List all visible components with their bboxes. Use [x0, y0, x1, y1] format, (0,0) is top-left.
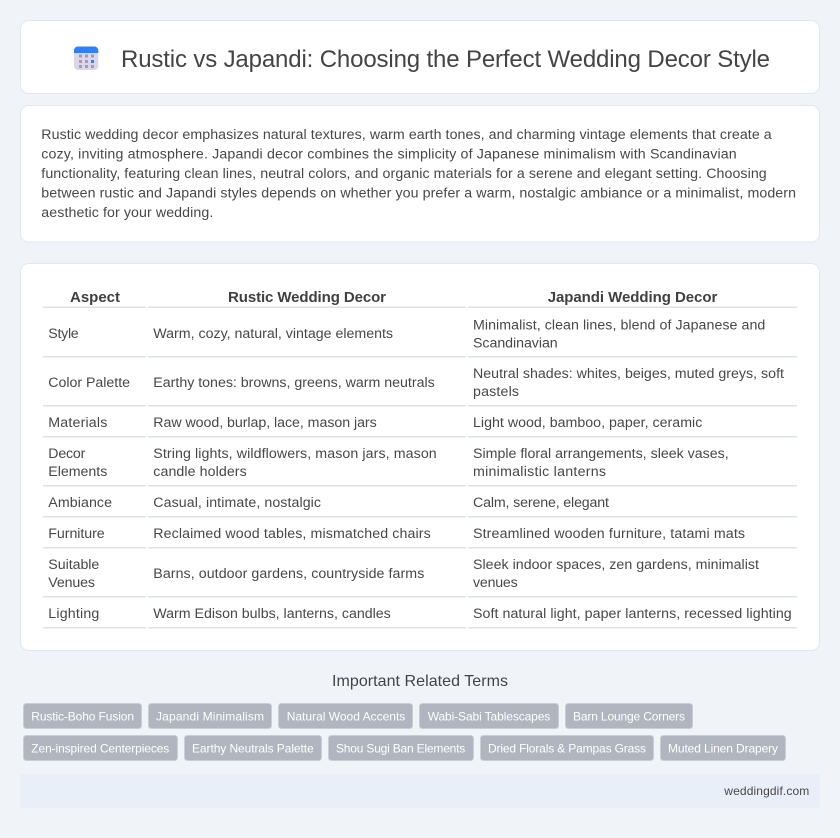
row: color palette: Earthy tones: browns, greens, warm neutrals	[153, 375, 435, 391]
table header row: Rustic Wedding Decor	[228, 289, 386, 306]
row: lighting: Lighting	[48, 606, 99, 622]
row: ambiance: Calm, serene, elegant	[473, 495, 609, 511]
row: decor elements: Decor	[48, 446, 86, 462]
tag: Rustic-Boho Fusion: Rustic-Boho Fusion	[31, 709, 134, 723]
table header row: Japandi Wedding Decor	[548, 289, 717, 306]
row: decor elements	[48, 446, 729, 480]
tag: Rustic-Boho Fusion	[24, 704, 142, 728]
row: materials: Materials	[48, 415, 107, 431]
tag: Japandi Minimalism: Japandi Minimalism	[156, 709, 264, 723]
row: style: Style	[48, 326, 79, 342]
row: suitable venues: Venues	[48, 575, 95, 591]
tag: Barn Lounge Corners	[566, 704, 692, 728]
intro paragraph: between rustic and Japandi styles depends on whether you prefer a warm, nostalgic ambiance or a minimalist, modern	[41, 186, 796, 202]
footer bar	[20, 774, 820, 808]
tag: Barn Lounge Corners: Barn Lounge Corners	[573, 709, 685, 723]
intro paragraph: functionality, featuring clean lines, neutral colors, and organic materials for a serene and elegant setting. Choosing	[41, 166, 767, 182]
intro paragraph	[41, 127, 796, 221]
tag: Wabi-Sabi Tablescapes: Wabi-Sabi Tablescapes	[428, 709, 550, 723]
row: ambiance: Ambiance	[48, 495, 112, 511]
tag: Shou Sugi Ban Elements: Shou Sugi Ban Elements	[336, 741, 465, 755]
row: color palette: Neutral shades: whites, beiges, muted greys, soft	[473, 366, 784, 382]
title: Rustic vs Japandi: Choosing the Perfect Wedding Decor Style	[121, 46, 770, 73]
tag: Natural Wood Accents	[278, 704, 412, 728]
heading: related terms: Important Related Terms	[332, 673, 508, 690]
tag: Earthy Neutrals Palette: Earthy Neutrals Palette	[192, 741, 314, 755]
tag: Wabi-Sabi Tablescapes	[420, 704, 558, 728]
tag: Japandi Minimalism	[148, 704, 272, 728]
row: suitable venues	[48, 557, 759, 591]
row: ambiance	[48, 495, 609, 511]
row: ambiance: Casual, intimate, nostalgic	[153, 495, 321, 511]
tag: Shou Sugi Ban Elements	[328, 736, 474, 760]
table header row	[70, 289, 717, 306]
tag: Dried Florals & Pampas Grass: Dried Florals & Pampas Grass	[488, 741, 646, 755]
row: decor elements: Elements	[48, 464, 107, 480]
row: furniture	[48, 526, 745, 542]
tag: Dried Florals & Pampas Grass	[480, 736, 654, 760]
row: lighting: Warm Edison bulbs, lanterns, candles	[153, 606, 391, 622]
tag: Muted Linen Drapery	[660, 736, 786, 760]
tag: Natural Wood Accents: Natural Wood Accents	[287, 709, 405, 723]
table header row: Aspect	[70, 289, 120, 306]
row: lighting	[48, 606, 792, 622]
row: suitable venues: venues	[473, 575, 518, 591]
tag list: related terms	[24, 704, 786, 760]
row: furniture: Furniture	[48, 526, 105, 542]
row: furniture: Streamlined wooden furniture, tatami mats	[473, 526, 745, 542]
row: decor elements: String lights, wildflowers, mason jars, mason	[153, 446, 437, 462]
row: color palette: Color Palette	[48, 375, 130, 391]
panel: header	[20, 20, 820, 94]
row: materials: Light wood, bamboo, paper, ceramic	[473, 415, 702, 431]
row: style: Minimalist, clean lines, blend of Japanese and	[473, 317, 765, 333]
intro paragraph: aesthetic for your wedding.	[41, 205, 213, 221]
panel: introduction	[20, 106, 820, 242]
row: suitable venues: Sleek indoor spaces, zen gardens, minimalist	[473, 557, 759, 573]
tag: Zen-inspired Centerpieces	[24, 736, 178, 760]
tag: Zen-inspired Centerpieces: Zen-inspired Centerpieces	[31, 741, 169, 755]
intro paragraph: Rustic wedding decor emphasizes natural textures, warm earth tones, and charming vintage elements that create a	[41, 127, 772, 143]
row: decor elements: candle holders	[153, 464, 247, 480]
row: materials	[48, 415, 702, 431]
row: style	[48, 317, 765, 351]
intro paragraph: cozy, inviting atmosphere. Japandi decor combines the simplicity of Japanese minimalism with Scandinavian	[41, 146, 737, 162]
panel: comparison table	[20, 264, 820, 650]
row: color palette	[48, 366, 784, 400]
row: style: Warm, cozy, natural, vintage elements	[153, 326, 393, 342]
row: materials: Raw wood, burlap, lace, mason jars	[153, 415, 377, 431]
row: suitable venues: Suitable	[48, 557, 99, 573]
icon: calendar	[74, 46, 98, 70]
row: style: Scandinavian	[473, 335, 558, 351]
tag: Earthy Neutrals Palette	[184, 736, 322, 760]
row: color palette: pastels	[473, 384, 519, 400]
footer source: weddingdif.com	[723, 784, 809, 798]
row: decor elements: Simple floral arrangements, sleek vases,	[473, 446, 729, 462]
row: lighting: Soft natural light, paper lanterns, recessed lighting	[473, 606, 792, 622]
row: suitable venues: Barns, outdoor gardens, countryside farms	[153, 566, 424, 582]
row: decor elements: minimalistic lanterns	[473, 464, 606, 480]
tag: Muted Linen Drapery: Muted Linen Drapery	[668, 741, 778, 755]
row: furniture: Reclaimed wood tables, mismatched chairs	[153, 526, 431, 542]
